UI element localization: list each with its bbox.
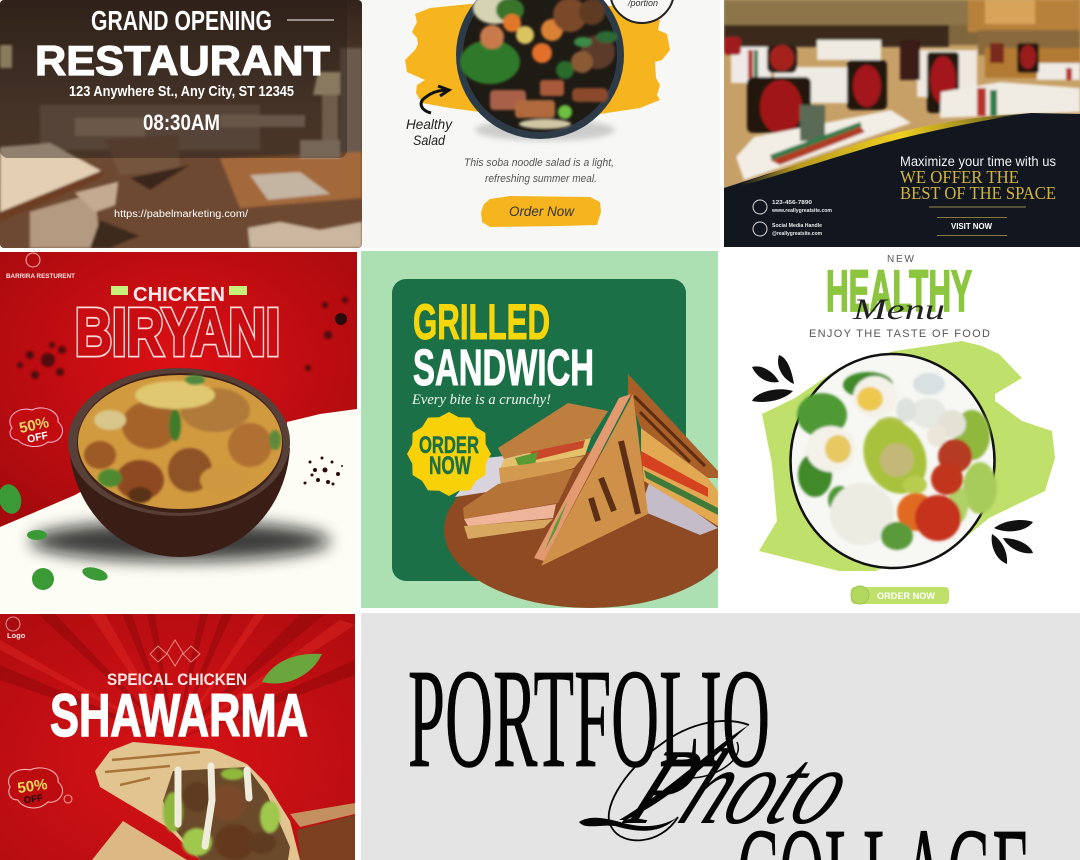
visit now button: VISIT NOW <box>951 222 992 231</box>
heading: biryani: BIRYANI <box>75 295 280 370</box>
visit now button <box>937 217 1007 236</box>
gold headline <box>900 171 1056 199</box>
sunburst rays <box>0 614 355 740</box>
label: healthy salad: Salad <box>413 132 446 148</box>
translucent heading overlay <box>0 0 347 158</box>
tagline: ENJOY THE TASTE OF FOOD <box>809 328 990 340</box>
panel: chicken biryani <box>0 252 357 612</box>
contact details: 123-456-7890 <box>772 200 812 206</box>
noodle bowl <box>456 0 624 139</box>
contact details: www.reallygreatsite.com <box>771 208 832 214</box>
order now burst: NOW <box>429 452 471 480</box>
panel: healthy menu <box>722 251 1080 612</box>
label: healthy salad: Healthy <box>406 116 453 132</box>
gold headline: BEST OF THE SPACE <box>900 183 1056 203</box>
gold headline: WE OFFER THE <box>900 167 1019 187</box>
salad plate <box>790 354 997 568</box>
icon: green leaf <box>262 654 322 683</box>
heading: grilled: GRILLED <box>413 294 550 350</box>
badge: 50% off: 50% <box>18 414 51 437</box>
portion badge <box>610 0 674 23</box>
heading: shawarma: SHAWARMA <box>50 682 308 749</box>
heading: biryani: BIRYANI <box>75 295 280 370</box>
description text <box>464 157 614 185</box>
panel: soba noodle salad <box>362 0 720 248</box>
badge: 50% off <box>9 768 72 808</box>
lower left sandwich <box>463 469 574 539</box>
panel: restaurant space ad <box>724 0 1080 247</box>
subheading: SPEICAL CHICKEN <box>107 670 247 689</box>
panel: portfolio title <box>361 613 1080 860</box>
bowl shadow <box>30 521 330 561</box>
contact details: Social Media Handle <box>772 223 822 229</box>
ink splatter <box>17 297 348 486</box>
shawarma wrap <box>92 742 300 860</box>
lime brush stroke <box>759 341 1055 571</box>
address: 123 Anywhere St., Any City, ST 12345 <box>69 83 294 100</box>
badge: 50% off <box>10 408 63 447</box>
website url: https://pabelmarketing.com/ <box>114 209 248 220</box>
badge: 50% off: 50% <box>16 776 49 797</box>
icon: black leaves top <box>752 355 794 402</box>
bowl shadow <box>475 119 615 141</box>
gold swoosh <box>740 113 1031 186</box>
wooden plate <box>444 450 736 608</box>
right sandwich <box>628 374 718 526</box>
heading: biryani <box>76 306 279 358</box>
panel: chicken shawarma <box>0 614 355 860</box>
logo: BARRIRA RESTURENT <box>6 273 75 280</box>
logo: Logo <box>7 631 26 640</box>
heading: restaurant: RESTAURANT <box>35 37 330 84</box>
centre sandwich <box>534 394 648 566</box>
contact details: @reallygreatsite.com <box>772 231 822 237</box>
panel: grand opening restaurant <box>0 0 362 248</box>
sandwiches <box>463 374 718 566</box>
logo <box>6 617 26 640</box>
yellow brush stroke <box>405 4 670 114</box>
heading: grand opening: GRAND OPENING <box>91 5 272 36</box>
biryani bowl <box>68 368 290 557</box>
red background <box>0 252 357 527</box>
opening time: 08:30AM <box>143 110 220 135</box>
heading: chicken: CHICKEN <box>133 284 225 306</box>
panel: grilled sandwich <box>361 251 736 608</box>
order now button: ORDER NOW <box>877 591 935 602</box>
icon: black leaves bottom <box>992 520 1033 564</box>
restaurant interior photo <box>0 45 362 248</box>
order now button <box>851 586 949 604</box>
tagline: Every bite is a crunchy! <box>411 392 551 408</box>
order now button <box>481 196 601 227</box>
chili slices <box>0 482 109 590</box>
badge: 50% off: OFF <box>26 429 50 446</box>
tagline: Maximize your time with us <box>900 154 1056 169</box>
dark info panel <box>724 113 1080 247</box>
green card <box>392 279 686 581</box>
heading: sandwich: SANDWICH <box>413 339 594 396</box>
contact details <box>753 200 832 237</box>
skewer and board <box>290 803 355 860</box>
heading: chicken <box>111 286 247 301</box>
dining room photo <box>724 0 1080 180</box>
description text: This soba noodle salad is a light, <box>464 157 614 169</box>
order now burst: ORDER <box>419 432 479 459</box>
label: new: NEW <box>887 254 915 265</box>
title: photo script: Photo <box>610 727 874 847</box>
label: healthy salad <box>406 119 453 145</box>
order now burst <box>407 412 491 496</box>
upper left sandwich <box>498 403 608 488</box>
icon: curved arrow <box>421 86 449 113</box>
order now button: Order Now <box>509 203 575 219</box>
description text: refreshing summer meal. <box>485 173 597 185</box>
heading: menu script: Menu <box>852 293 945 326</box>
logo <box>6 253 75 280</box>
badge: 50% off: OFF <box>23 793 44 806</box>
diamond ornament <box>150 640 200 666</box>
